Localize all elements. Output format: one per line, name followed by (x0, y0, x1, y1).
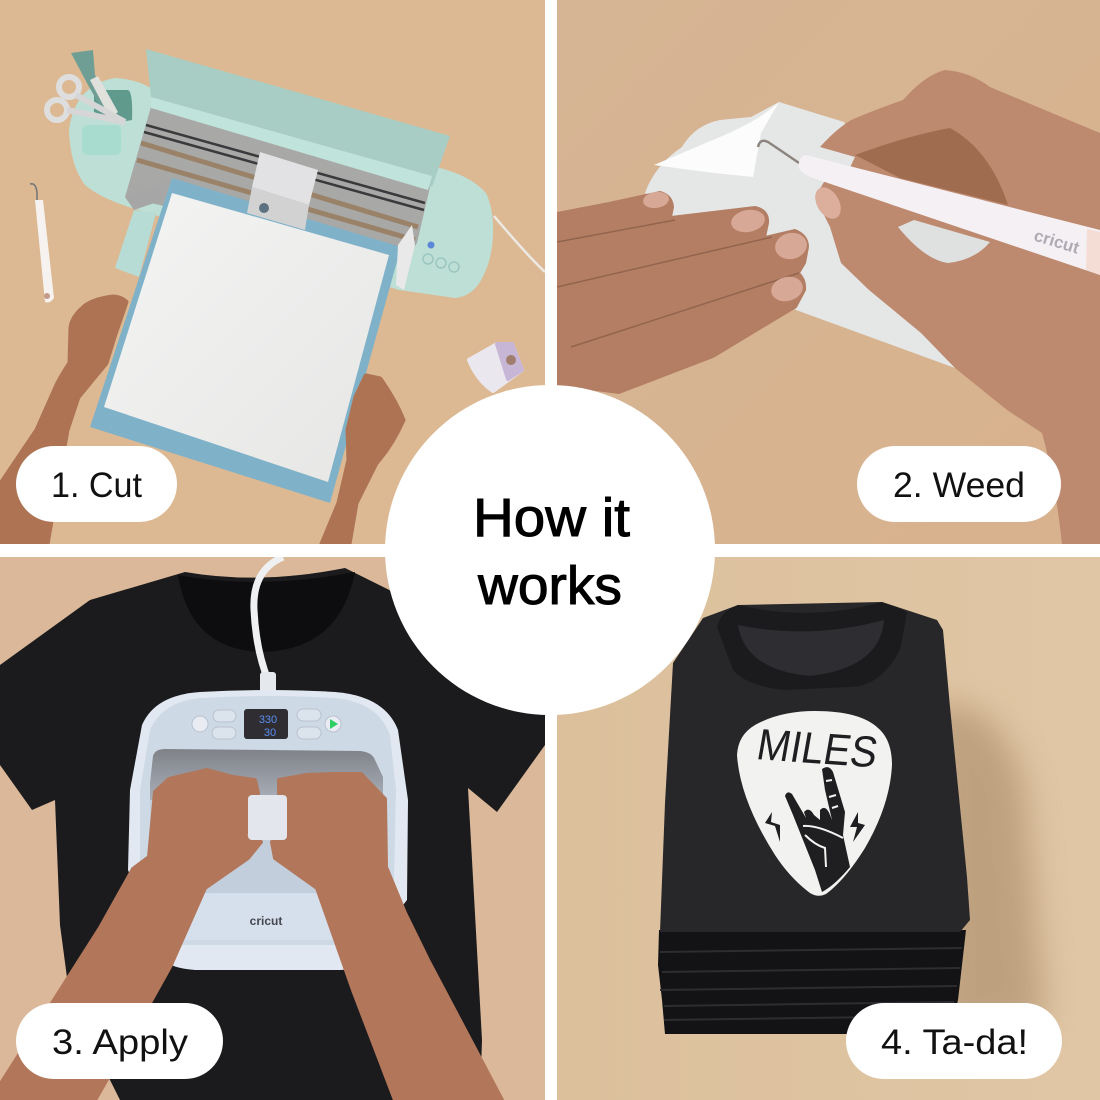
centre circle: how it works: works (477, 556, 622, 616)
weeding tool: cricut (1032, 226, 1082, 258)
icon: power cable (494, 216, 545, 272)
label: 1. Cut: 1. Cut (51, 466, 142, 505)
heat press cable (254, 557, 283, 680)
weeding tool (758, 141, 1100, 275)
label: 4. Ta-da! (846, 1003, 1062, 1079)
cutting mat and paper (90, 178, 415, 503)
cutting machine (69, 49, 493, 298)
heat press: 330 (259, 714, 277, 726)
right hand on mat (322, 376, 403, 544)
cutting carriage (247, 152, 318, 230)
label: 2. Weed (857, 446, 1061, 522)
lightning bolts (765, 812, 780, 842)
heat press: 30 (264, 727, 276, 739)
left arm and hand (0, 770, 261, 1100)
display (244, 709, 288, 739)
vinyl seen through hand (898, 220, 990, 263)
label: 2. Weed: 2. Weed (893, 466, 1025, 505)
heat press (128, 672, 408, 970)
panel: step 3 apply (0, 557, 545, 1100)
panel: step 4 ta-da (557, 557, 1100, 1100)
tool holder cups (94, 90, 132, 122)
icon: tools in holder (47, 50, 125, 122)
panel: step 2 weed (557, 0, 1100, 544)
label: 3. Apply (16, 1003, 223, 1079)
peeled vinyl corner (654, 102, 779, 177)
black t-shirt (0, 568, 545, 1100)
folded shirt stack (658, 602, 970, 1034)
handle recess (150, 749, 383, 800)
control buttons (213, 710, 236, 722)
shirt collar (717, 602, 907, 690)
icon: tape cutter (469, 344, 522, 391)
rock hand (785, 767, 850, 892)
mat left support (115, 210, 156, 277)
left hand on mat (0, 297, 126, 544)
label: 4. Ta-da!: 4. Ta-da! (881, 1023, 1028, 1062)
label: 1. Cut (16, 446, 177, 522)
control buttons (428, 242, 434, 248)
right arm and hand (272, 774, 502, 1100)
guitar pick graphic (737, 711, 892, 896)
shirt shadow (949, 695, 1055, 1014)
centre circle: how it works: How it (473, 488, 630, 548)
right hand holding tool (810, 70, 1100, 544)
icon: weeding tool (30, 184, 54, 302)
name on pick: MILES (753, 720, 881, 777)
heat press handle (248, 795, 287, 840)
left hand on vinyl (557, 190, 809, 393)
centre circle: how it works (385, 385, 715, 715)
heat press: cricut (250, 914, 282, 928)
panel: step 1 cut (0, 0, 545, 544)
label: 3. Apply: 3. Apply (52, 1023, 189, 1062)
white vinyl sheet (645, 102, 955, 368)
